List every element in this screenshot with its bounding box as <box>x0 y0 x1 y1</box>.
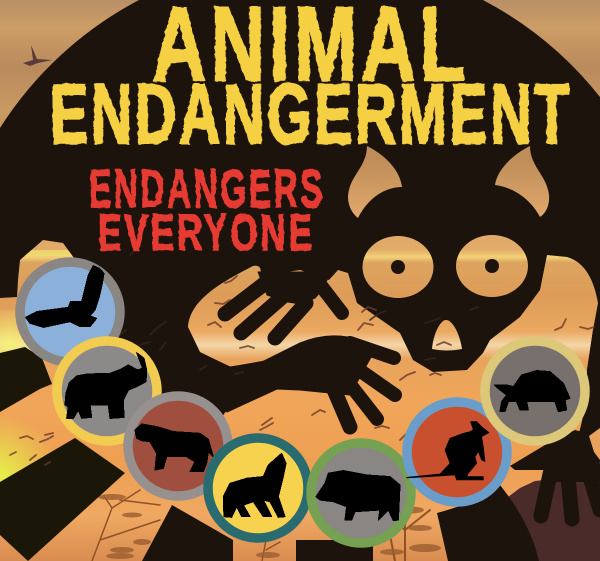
tree: bottom gap under wolf <box>256 540 280 561</box>
flock of birds <box>10 249 594 465</box>
animal badge: kangaroo <box>407 402 507 502</box>
subtitle <box>89 159 325 261</box>
animal badge: boar <box>311 443 411 543</box>
wedge: upper <box>0 347 52 412</box>
dark wedges of the tail <box>0 330 600 561</box>
cut-out: right ear <box>495 146 549 217</box>
cut-out: right eye <box>456 235 528 297</box>
cut-out: left eye <box>362 236 434 298</box>
hand: lower right with fingers <box>541 462 600 519</box>
background trees <box>92 490 441 561</box>
animal badge: tortoise <box>485 341 585 441</box>
subtitle line 1: ENDANGERS <box>89 159 325 219</box>
sky cut-outs in the lemur body <box>0 146 600 561</box>
lemur hands <box>200 272 600 519</box>
subtitle line 2: EVERYONE <box>98 204 315 261</box>
sky notch at right edge <box>589 428 600 460</box>
tree: lower left <box>92 490 160 561</box>
animal badge: eagle <box>20 262 120 362</box>
yellow-green light glow on left <box>0 250 72 482</box>
animal badge: rhino <box>57 341 157 441</box>
cut-out: left ear <box>348 146 402 218</box>
cut-out: arm, belly and lower sky <box>0 255 600 561</box>
icon: bird in the sky, upper left <box>23 45 52 66</box>
cut-out: tail and left side <box>0 240 100 387</box>
cut-out: nose <box>432 320 462 350</box>
bottom right forest silhouette <box>508 462 600 561</box>
hand: upper left with fingers <box>225 272 342 338</box>
right eye pupil <box>485 259 499 273</box>
branch arm from tortoise to right hand <box>510 430 600 480</box>
left eye pupil <box>391 260 405 274</box>
wedge: middle <box>0 438 125 561</box>
wedge: lower <box>142 505 233 561</box>
animal badge: wolf <box>208 438 308 538</box>
animal badge: tiger <box>128 396 228 496</box>
wedge: bottom centre <box>296 540 373 561</box>
lemur arm lower right <box>437 485 539 561</box>
hand: centre with fingers <box>200 336 395 427</box>
tree: bottom centre <box>380 505 441 561</box>
right edge of lemur body <box>587 330 600 433</box>
title <box>50 0 572 161</box>
